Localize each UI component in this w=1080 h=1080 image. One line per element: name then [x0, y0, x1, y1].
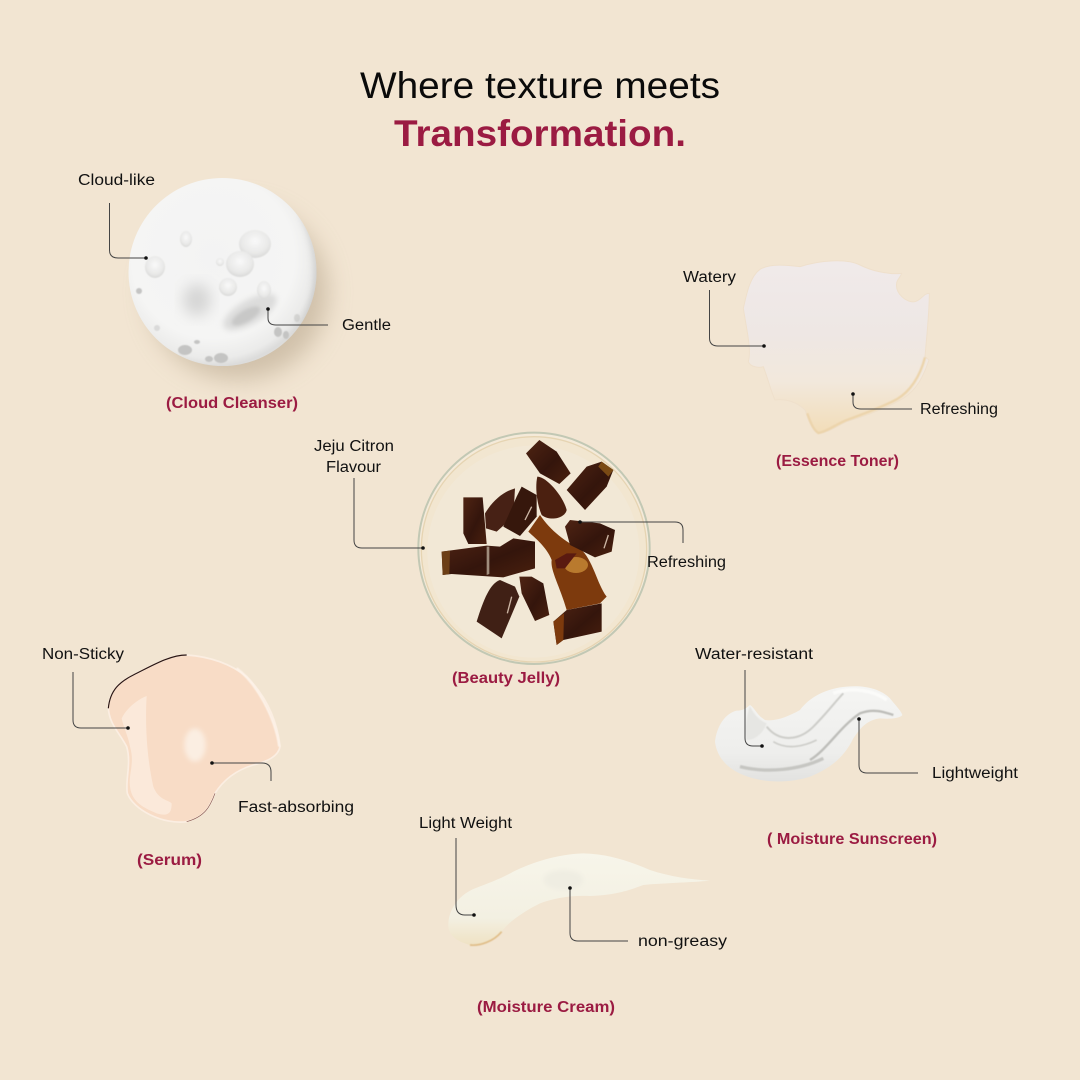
connector: refreshing [851, 392, 912, 409]
label: refreshing: Refreshing [647, 554, 726, 571]
label: water-resistant: Water-resistant [695, 646, 814, 663]
connector: refreshing [578, 520, 683, 543]
image: sunscreen swirl [715, 686, 902, 781]
connector: lightweight [857, 717, 918, 773]
label: watery: Watery [683, 269, 736, 286]
label: non-greasy: non-greasy [638, 933, 727, 950]
name: moisture cream: (Moisture Cream) [477, 999, 615, 1016]
label: light weight: Light Weight [419, 815, 513, 832]
name: beauty jelly: (Beauty Jelly) [452, 670, 560, 687]
label: gentle: Gentle [342, 317, 391, 334]
connector: light weight [456, 838, 476, 917]
connector: watery [710, 290, 766, 348]
label: lightweight: Lightweight [932, 765, 1019, 782]
connector: water-resistant [745, 670, 764, 748]
label: non-sticky: Non-Sticky [42, 646, 124, 663]
panel: essence toner [683, 261, 998, 470]
label: fast-absorbing: Fast-absorbing [238, 799, 354, 816]
connector: gentle [266, 307, 328, 325]
image: serum drop [108, 655, 280, 822]
label: cloud-like: Cloud-like [78, 172, 155, 189]
panel: moisture cream [419, 815, 727, 1016]
connector: fast-absorbing [210, 761, 271, 781]
label: jeju citron flavour [314, 438, 394, 476]
name: cloud cleanser: (Cloud Cleanser) [166, 395, 298, 412]
title: Transformation. [394, 113, 686, 154]
name: serum: (Serum) [137, 852, 202, 869]
connector: jeju citron flavour [354, 478, 425, 550]
image: foam blob [128, 178, 335, 380]
connector: non-greasy [568, 886, 628, 941]
panel: serum [42, 646, 354, 869]
label: jeju citron flavour: Flavour [326, 459, 381, 476]
title [360, 65, 720, 154]
connector: non-sticky [73, 672, 130, 730]
panel: beauty jelly [314, 433, 726, 687]
image: toner swatch [743, 261, 929, 433]
title: Where texture meets [360, 65, 720, 106]
label: refreshing: Refreshing [920, 401, 998, 418]
name: essence toner: (Essence Toner) [776, 453, 899, 470]
connector: cloud-like [110, 203, 148, 260]
image: jelly dish [418, 433, 650, 664]
image: cream smear [448, 853, 710, 945]
label: jeju citron flavour: Jeju Citron [314, 438, 394, 455]
name: moisture sunscreen: ( Moisture Sunscreen) [767, 831, 937, 848]
panel: moisture sunscreen [695, 646, 1019, 848]
panel: cloud cleanser [78, 172, 391, 412]
